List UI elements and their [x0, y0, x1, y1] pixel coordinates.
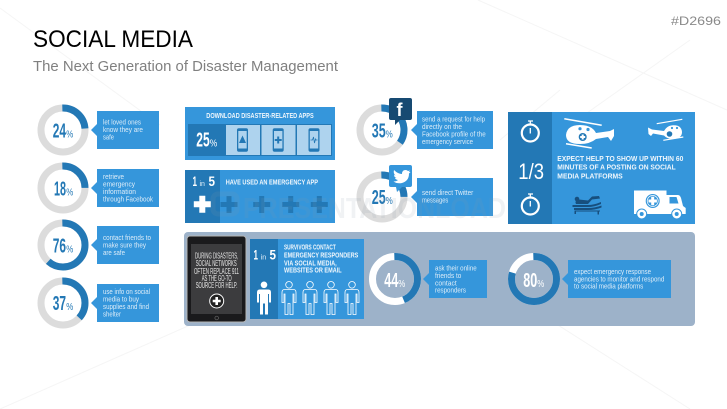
panel: survivors background [184, 232, 695, 326]
panel: 1 in 5 survivors contact: VIA SOCIAL MEDIA, [284, 258, 337, 268]
stat: 80% expect agencies to monitor: agencies to monitor and respond [574, 274, 664, 284]
stat: 80% expect agencies to monitor: 80 [523, 270, 537, 292]
panel: 1 in 5 survivors contact [250, 239, 364, 319]
stat: 76% contact friends: make sure they [103, 240, 146, 250]
icon: phone warning [237, 128, 248, 152]
text: expect help: MINUTES OF A POSTING ON SOCIAL [557, 163, 676, 172]
stat: 18% retrieve information: % [66, 187, 73, 198]
panel: 1 in 5 used an emergency app [185, 170, 335, 223]
text: expect help: EXPECT HELP TO SHOW UP WITHIN 60 [557, 154, 683, 163]
icon: tablet with message: SOCIAL NETWORKS [196, 259, 237, 268]
stat: 76% contact friends: are safe [103, 248, 125, 257]
stat: 76% contact friends [41, 223, 159, 267]
subtitle: The Next Generation of Disaster Management [33, 58, 339, 75]
icon: person filled [257, 282, 271, 314]
panel: 1 in 5 used an emergency app: 5 [208, 173, 215, 189]
panel: 1 in 5 survivors contact: in [261, 255, 266, 262]
stat: 24% let loved ones know: know they are [103, 125, 143, 134]
stat: 44% ask online friends: friends to [435, 271, 461, 280]
icon: phone plus [273, 128, 284, 152]
icon: tablet with message: SOURCE FOR HELP. [196, 281, 237, 290]
icon: Twitter bubble [389, 165, 412, 192]
stat: 44% ask online friends: responders [435, 286, 466, 295]
stat: 44% ask online friends [372, 256, 487, 302]
icons: dark pluses [220, 196, 328, 213]
stat: 25% direct Twitter messages: 25 [372, 187, 386, 209]
panel: 1 in 5 survivors contact: SURVIVORS CONTACT [284, 243, 336, 252]
icon: phone heartbeat [308, 128, 320, 152]
stat: 24% let loved ones know: % [66, 130, 73, 141]
stat: 18% retrieve information: 18 [54, 178, 66, 200]
stat: 76% contact friends: % [66, 245, 73, 256]
panel: download apps: % [210, 139, 217, 150]
stat: 80% expect agencies to monitor: to social media platforms [574, 282, 644, 291]
stat: 24% let loved ones know: safe [103, 132, 114, 142]
stat: 24% let loved ones know: let loved ones [103, 118, 141, 126]
panel: 1 in 5 used an emergency app: in [200, 181, 205, 188]
panel: 1 in 5 used an emergency app: 1 [192, 173, 197, 189]
stat: 25% direct Twitter messages [360, 165, 493, 219]
stat: 37% use info on social media: shelter [103, 310, 122, 318]
icon: tablet with message [187, 236, 246, 322]
stat: 35% request via Facebook: Facebook profile of the [422, 129, 486, 138]
icon: small helicopter [648, 119, 683, 140]
stat: 76% contact friends: contact friends to [103, 233, 151, 242]
stat: 37% use info on social media: 37 [53, 293, 66, 315]
stat: 25% direct Twitter messages: send direct Twitter [422, 188, 474, 197]
stat: 80% expect agencies to monitor: expect emergency response [574, 267, 651, 276]
icon: stopwatch bottom [522, 194, 539, 214]
stat: 35% request via Facebook: send a request for help [422, 114, 485, 123]
icon: patient on bed [572, 196, 602, 214]
stat: 18% retrieve information: through Facebook [103, 194, 153, 204]
stat: 35% request via Facebook: 35 [372, 120, 386, 142]
stat: 35% request via Facebook: % [386, 129, 393, 140]
stat: 37% use info on social media [41, 281, 159, 325]
stat: 80% expect agencies to monitor: % [537, 279, 544, 290]
stat: 37% use info on social media: supplies and find [103, 302, 149, 311]
panel: 1 in 5 survivors contact: WEBSITES OR EMAIL [284, 266, 342, 275]
stat: 35% request via Facebook: emergency service [422, 137, 473, 146]
icon: stopwatch top [522, 121, 539, 142]
icon: white plus [194, 196, 211, 213]
stat: 80% expect agencies to monitor [512, 256, 671, 302]
icon: tablet with message: DURING DISASTERS, [195, 252, 238, 260]
icon: ambulance [634, 190, 686, 219]
stat: 18% retrieve information: retrieve [103, 172, 124, 181]
product code: #D2696 [671, 14, 721, 28]
icon: Facebook bubble: f [396, 100, 404, 120]
stat: 76% contact friends: 76 [53, 236, 66, 258]
stat: 24% let loved ones know [41, 108, 159, 152]
panel: one third expect help within 60 minutes [508, 112, 695, 224]
icon: tablet with message: AS THE GO-TO [202, 274, 232, 283]
panel: 1 in 5 survivors contact: 5 [270, 247, 276, 263]
stat: 37% use info on social media: media to buy [103, 294, 139, 304]
stat: 18% retrieve information: emergency [103, 180, 135, 188]
watermark: PRESENTATIONLOAD [243, 193, 506, 225]
panel: 1 in 5 used an emergency app: HAVE USED AN EMERGENCY APP [226, 178, 318, 187]
stat: 25% direct Twitter messages: % [386, 196, 393, 207]
stat: 24% let loved ones know: 24 [53, 121, 67, 143]
stat: 44% ask online friends: 44 [384, 270, 399, 292]
stat: 25% direct Twitter messages: messages [422, 196, 449, 204]
icons: people outlined [282, 282, 359, 314]
title: SOCIAL MEDIA [33, 26, 193, 53]
text: expect help [557, 154, 683, 181]
stat: 44% ask online friends: ask their online [435, 263, 477, 272]
stat: 18% retrieve information: information [103, 187, 136, 196]
icon: large helicopter [564, 119, 614, 148]
stat: 44% ask online friends: % [398, 279, 405, 290]
panel: download apps: 25 [196, 130, 210, 152]
icon: tablet with message: OFTEN REPLACE 911 [194, 267, 239, 276]
stat: 37% use info on social media: % [66, 302, 73, 313]
stat: 35% request via Facebook [360, 98, 493, 152]
panel: 1 in 5 survivors contact: 1 [254, 247, 258, 263]
fraction: 1/3: 1/3 [518, 159, 544, 184]
panel: 1 in 5 survivors contact: EMERGENCY RESPONDERS [284, 251, 358, 260]
stat: 18% retrieve information [41, 166, 159, 210]
panel: download apps [185, 107, 335, 160]
stat: 37% use info on social media: use info on social [103, 287, 150, 296]
stat: 35% request via Facebook: directly on the [422, 122, 462, 131]
text: expect help: MEDIA PLATFORMS [557, 172, 623, 181]
stat: 44% ask online friends: contact [435, 278, 457, 287]
panel: download apps: DOWNLOAD DISASTER-RELATED APPS [206, 111, 314, 120]
